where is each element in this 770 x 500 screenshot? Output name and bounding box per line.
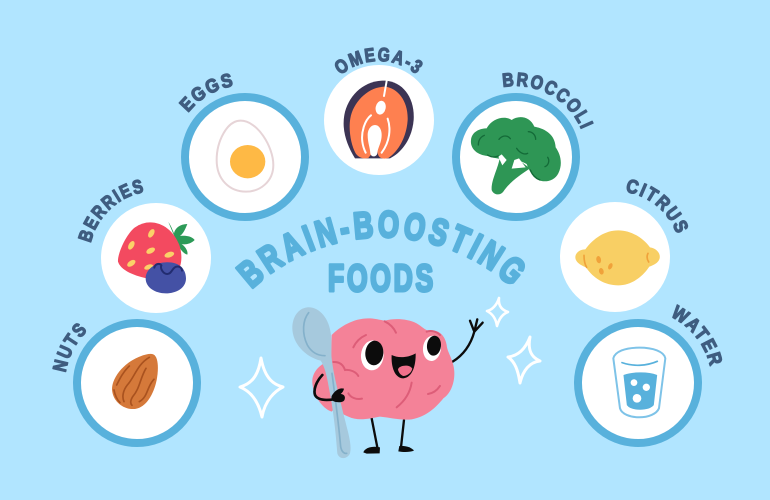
mouth [392,353,416,378]
mascot hand [331,388,345,402]
eggs circle [185,97,305,217]
sparkle right small [487,298,508,326]
sparkle right large [508,337,540,383]
nuts label: NUTS [52,323,86,372]
mascot legs [372,418,404,447]
panel: nuts [52,319,201,447]
panel: omega-3 [324,47,434,175]
icon: egg [217,121,273,192]
icon: lemon [575,230,660,285]
icon: salmon steak [344,81,414,159]
spoon [292,307,351,458]
water circle [578,323,698,443]
title line 1: BRAIN-BOOSTING [234,210,526,290]
mascot: brain with spoon [292,307,483,458]
broccoli label: BROCCOLI [502,72,594,130]
panel: citrus [560,179,688,312]
brain folds [333,321,440,407]
water label: WATER [672,304,722,367]
mascot left arm [315,375,334,400]
title line 2: FOODS [328,258,436,300]
sparkle left [240,358,283,417]
title: brain-boosting foods [234,210,526,300]
omega-3 label: OMEGA-3 [334,47,423,74]
panel: broccoli [452,72,594,221]
mascot feet [363,446,414,454]
berries circle [101,203,211,313]
berries label: BERRIES [78,179,144,243]
citrus circle [560,202,670,312]
icon: almond [112,354,158,409]
icon: glass of water [613,348,665,417]
citrus label: CITRUS [626,179,688,233]
icon: broccoli [471,117,561,194]
broccoli circle [456,97,576,217]
right eye [422,335,442,362]
nuts circle [77,323,197,443]
mascot right arm [453,319,483,362]
left eye [360,339,385,371]
panel: berries [78,179,211,313]
omega-3 circle [324,65,434,175]
panel: water [574,304,722,447]
brain body [312,318,454,420]
icon: strawberry and blueberry [118,222,195,293]
panel: eggs [178,73,309,221]
eggs label: EGGS [178,73,233,113]
